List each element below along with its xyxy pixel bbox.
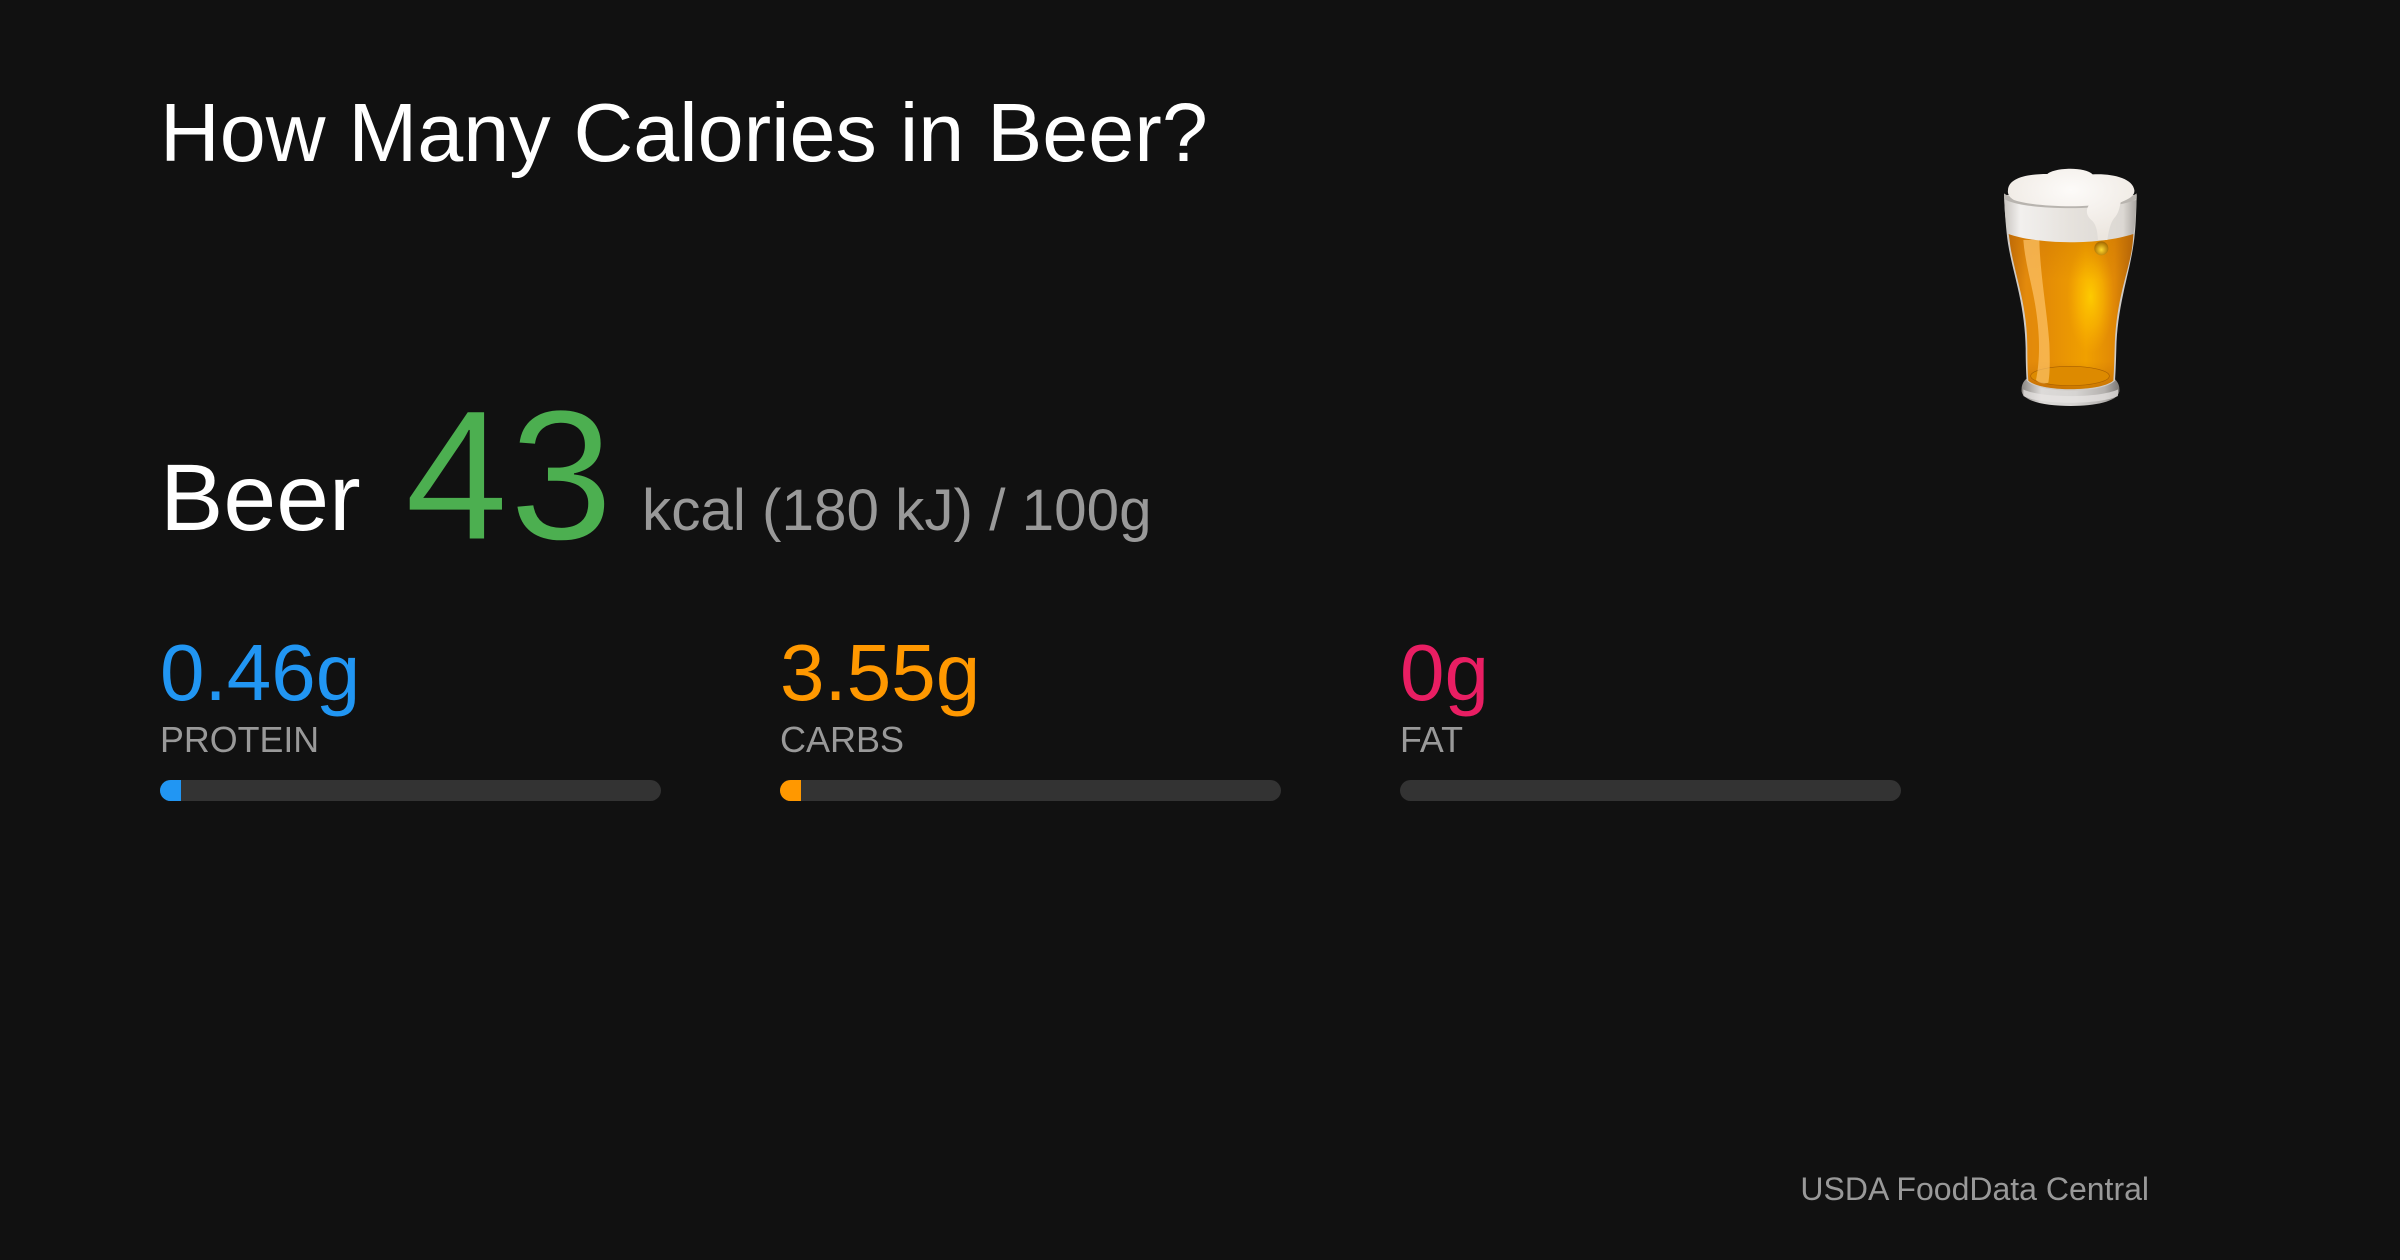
panel: fat xyxy=(1400,628,1901,801)
beer liquid xyxy=(2009,234,2133,389)
protein value: 0.46g xyxy=(160,628,360,717)
icon: beer glass xyxy=(2004,169,2137,406)
carbs bar fill xyxy=(780,780,801,801)
title: How Many Calories in Beer? xyxy=(160,86,1208,179)
calorie value: 43 xyxy=(405,373,615,579)
beer bottom ellipse xyxy=(2031,366,2109,386)
beer drop xyxy=(2094,241,2108,255)
protein bar track xyxy=(160,780,661,801)
panel: protein xyxy=(160,628,661,801)
glass outline xyxy=(2004,195,2137,391)
beer shading xyxy=(2009,234,2133,389)
rim xyxy=(2004,193,2137,208)
source: USDA FoodData Central xyxy=(1800,1171,2149,1207)
carbs label: CARBS xyxy=(780,719,904,760)
carbs bar track xyxy=(780,780,1281,801)
foam head xyxy=(2008,169,2134,240)
beer glow xyxy=(2067,240,2114,353)
base highlight xyxy=(2023,389,2118,403)
carbs value: 3.55g xyxy=(780,628,980,717)
protein bar fill xyxy=(160,780,181,801)
calorie unit: kcal (180 kJ) / 100g xyxy=(642,478,1152,543)
fat value: 0g xyxy=(1400,628,1489,717)
protein label: PROTEIN xyxy=(160,720,319,760)
fat label: FAT xyxy=(1400,720,1463,760)
panel: carbs xyxy=(780,628,1281,801)
glass reflection xyxy=(2023,240,2050,383)
food name: Beer xyxy=(160,445,361,551)
foam band xyxy=(2004,200,2136,242)
fat bar track xyxy=(1400,780,1901,801)
glass base xyxy=(2022,377,2119,406)
